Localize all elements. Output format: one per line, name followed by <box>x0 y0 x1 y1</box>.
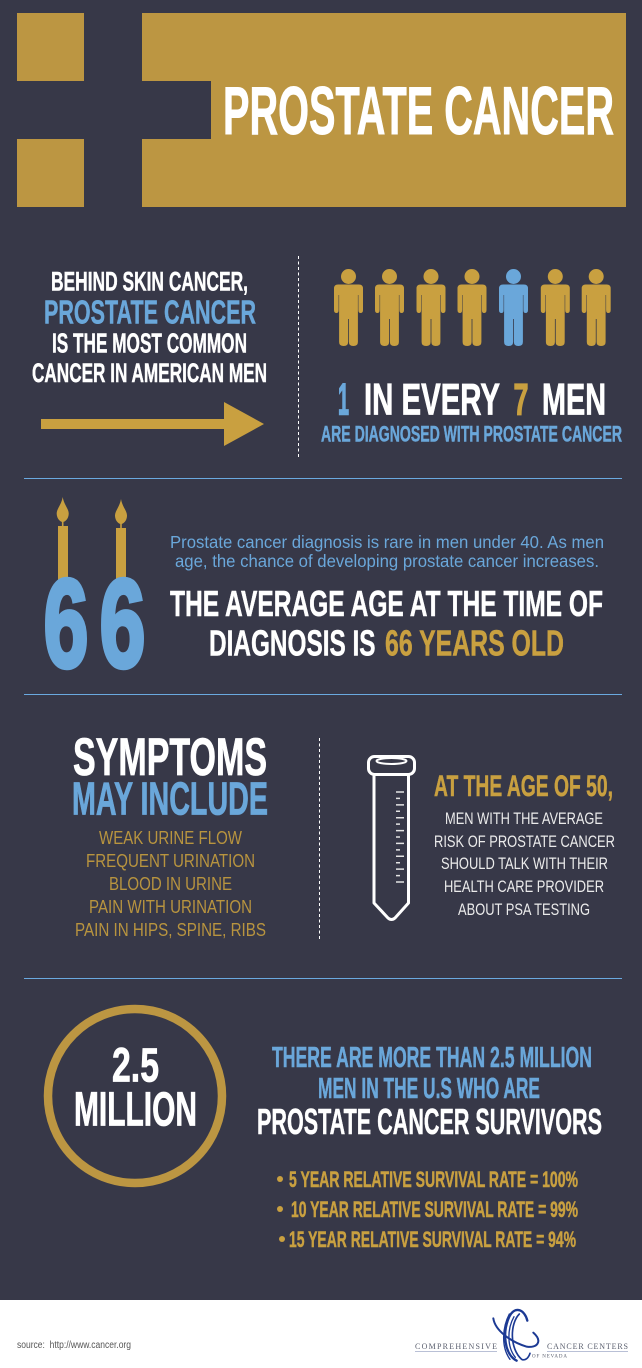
list of symptoms <box>75 828 266 940</box>
heading: survivors <box>257 1042 602 1142</box>
panel: header banner <box>17 13 626 207</box>
heading: average age at diagnosis: DIAGNOSIS IS <box>209 622 376 664</box>
text block: behind skin cancer: PROSTATE CANCER <box>44 294 256 332</box>
logo: Comprehensive Cancer Centers: OF NEVADA <box>532 1354 567 1360</box>
icon: birthday candles <box>57 497 127 580</box>
text block: behind skin cancer: BEHIND SKIN CANCER, <box>51 266 248 296</box>
text block: PSA advice <box>434 810 615 919</box>
text block: PSA advice: MEN WITH THE AVERAGE <box>445 810 603 828</box>
list of symptoms: BLOOD IN URINE <box>109 874 232 894</box>
logo: Comprehensive Cancer Centers: CANCER CENTERS <box>547 1342 628 1351</box>
list of symptoms: WEAK URINE FLOW <box>99 828 242 848</box>
statistic: 1 in every 7 men: IN EVERY <box>364 376 500 424</box>
panel: survivors <box>48 1009 602 1252</box>
panel: footer <box>0 1300 642 1368</box>
statistic: 1 in every 7 men: MEN <box>542 376 606 424</box>
heading: symptoms: SYMPTOMS <box>73 728 267 787</box>
arrow <box>41 402 264 446</box>
badge: 2.5 million: MILLION <box>74 1084 197 1136</box>
text block: rare under 40: Prostate cancer diagnosis is rare in men under 40. As men <box>170 532 604 552</box>
text block: behind skin cancer: CANCER IN AMERICAN MEN <box>32 358 267 388</box>
panel: average age <box>44 497 604 694</box>
text block: behind skin cancer <box>32 266 267 388</box>
icon: test tube <box>368 756 414 920</box>
logo: Comprehensive Cancer Centers <box>415 1310 628 1361</box>
badge: 2.5 million <box>48 1009 222 1183</box>
badge: 2.5 million: 2.5 <box>112 1040 159 1092</box>
text block: behind skin cancer: IS THE MOST COMMON <box>52 328 247 358</box>
statistic: 1 in every 7 men: 7 <box>514 376 528 424</box>
panel: PSA testing <box>368 756 615 920</box>
panel: 1 in 7 men <box>321 269 622 446</box>
heading: may include: MAY INCLUDE <box>72 772 268 824</box>
icon row: seven men <box>334 269 611 346</box>
text block: rare under 40: age, the chance of developing prostate cancer increases. <box>175 551 599 571</box>
list: survival rates <box>277 1167 578 1252</box>
logo: Comprehensive Cancer Centers: COMPREHENSIVE <box>415 1342 497 1351</box>
heading: average age at diagnosis: 66 YEARS OLD <box>385 622 564 664</box>
list of symptoms: FREQUENT URINATION <box>86 851 255 871</box>
text block: PSA advice: ABOUT PSA TESTING <box>458 901 590 919</box>
text block: rare under 40 <box>170 532 604 571</box>
big number 66: 6 <box>44 555 88 694</box>
panel: most common cancer statement <box>32 266 267 446</box>
heading: average age at diagnosis <box>170 583 603 664</box>
list of symptoms: PAIN IN HIPS, SPINE, RIBS <box>75 920 266 940</box>
source: source: http://www.cancer.org <box>17 1340 131 1351</box>
big number 66 <box>44 555 146 694</box>
statistic: 1 in every 7 men: 1 <box>338 376 349 424</box>
list of symptoms: PAIN WITH URINATION <box>89 897 252 917</box>
cross-shaped gold blocks <box>17 13 626 207</box>
big number 66: 6 <box>100 555 146 694</box>
panel: symptoms <box>72 728 268 940</box>
